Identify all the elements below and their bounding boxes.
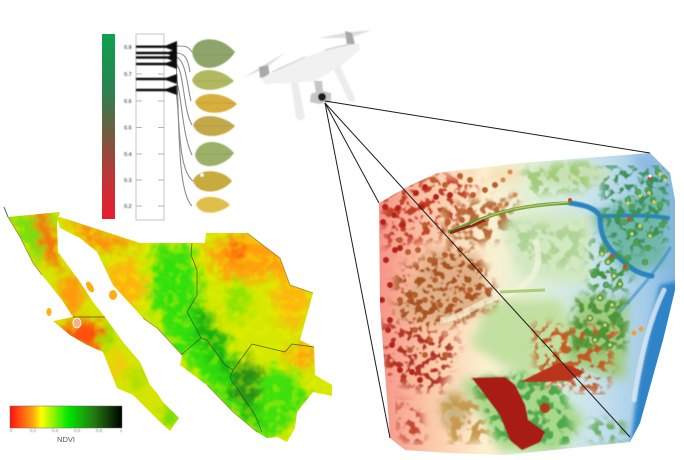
salt flat outline	[73, 318, 81, 328]
legend tick labels: 0.4	[52, 428, 59, 433]
orthomosaic NDVI image	[375, 150, 682, 460]
connector curves from arrows to leaves	[176, 46, 193, 206]
NDVI legend	[10, 406, 123, 444]
legend tick labels: 0.2	[30, 428, 37, 433]
scale labels: 0.7	[124, 72, 132, 78]
mainland NDVI surface	[58, 217, 332, 442]
red and brown tree crowns, left	[382, 172, 515, 380]
NDVI scale box	[136, 34, 164, 220]
legend tick labels: 1	[120, 428, 123, 433]
color gradient bar	[102, 34, 115, 219]
islands	[46, 280, 117, 316]
peninsula NDVI surface	[8, 212, 179, 431]
legend tick labels: 0.8	[96, 428, 103, 433]
drone	[243, 30, 372, 121]
scale labels: 0.8	[124, 45, 132, 51]
measurement arrows	[136, 41, 177, 95]
legend tick labels: 0.6	[74, 428, 81, 433]
base gradient	[375, 150, 680, 460]
scale labels: 0.6	[124, 99, 132, 105]
state boundaries	[4, 207, 314, 432]
legend tick labels: 0	[10, 428, 13, 433]
water channels	[570, 203, 670, 400]
panel: leaf NDVI scale	[102, 34, 237, 220]
legend tick labels	[10, 428, 123, 433]
tree canopy mottling	[380, 165, 670, 395]
motors	[259, 31, 355, 78]
scale labels: 0.2	[124, 204, 132, 210]
dark red canopy patch	[472, 362, 585, 450]
sight lines from drone camera	[325, 101, 650, 438]
legend title: NDVI	[57, 435, 75, 444]
propellers	[243, 30, 372, 78]
scale labels: 0.4	[124, 152, 133, 158]
scale labels: 0.5	[124, 126, 132, 132]
scale labels	[124, 45, 133, 210]
colored zones	[395, 150, 675, 452]
deep blue water band	[630, 280, 682, 446]
leaf samples	[192, 39, 237, 213]
map: northwest Mexico NDVI	[0, 205, 340, 450]
ridge line	[448, 203, 570, 232]
camera gimbal	[310, 81, 331, 104]
bright tree crowns, upper right	[570, 172, 665, 345]
scale labels: 0.3	[124, 178, 132, 184]
drone body	[261, 43, 360, 84]
landing legs	[291, 66, 355, 121]
pale drainage lines	[440, 240, 538, 320]
legend gradient bar	[10, 406, 122, 428]
coast outline	[8, 217, 313, 432]
